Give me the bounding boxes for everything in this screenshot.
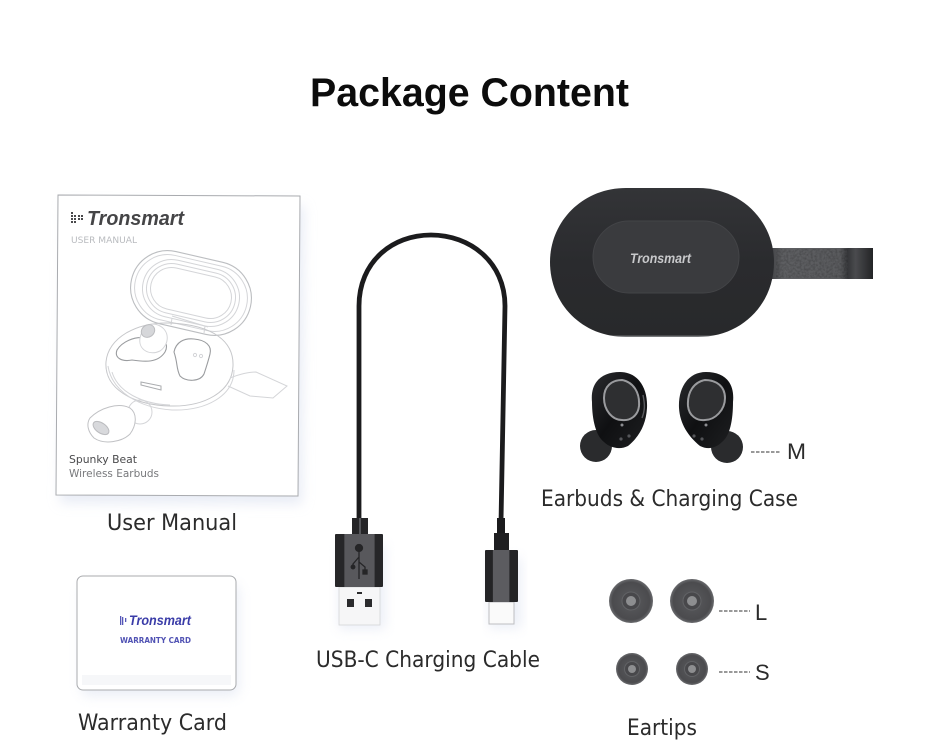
icon: USB trident [351, 544, 367, 579]
panel: charging case [550, 188, 873, 337]
callout: size M: M [787, 439, 806, 464]
manual product name: Spunky Beat [69, 454, 137, 466]
right earbud [679, 372, 743, 463]
label: warranty card: Warranty Card [78, 711, 227, 736]
callout: size S: S [755, 660, 770, 685]
callout: size S [719, 660, 770, 685]
manual product type: Wireless Earbuds [69, 468, 159, 480]
panel: USB-C charging cable [335, 235, 521, 629]
manual brand: Tronsmart [87, 208, 185, 230]
icon: manual logo dots [71, 212, 83, 223]
icon: warranty logo dots [120, 616, 126, 625]
case logo: Tronsmart [630, 251, 691, 266]
warranty brand: Tronsmart [129, 613, 191, 628]
USB-A connector [335, 518, 385, 629]
panel: warranty card [77, 576, 239, 696]
panel: user manual [56, 195, 304, 504]
eartips large [609, 579, 714, 623]
panel: eartips [609, 579, 770, 685]
case body [550, 188, 774, 337]
title: Package Content [310, 71, 629, 115]
callout: size L: L [755, 600, 767, 625]
label: eartips: Eartips [627, 716, 697, 741]
label: earbuds and charging case: Earbuds & Charging Case [541, 487, 798, 512]
manual subtitle: USER MANUAL [71, 236, 137, 246]
case logo panel [593, 221, 739, 293]
case strap [770, 248, 873, 279]
warranty card text: WARRANTY CARD [120, 636, 191, 645]
callout: size L [719, 600, 767, 625]
USB-C connector [485, 518, 521, 628]
left earbud [580, 372, 647, 462]
panel: earbuds [580, 372, 806, 464]
callout: size M [751, 439, 806, 464]
line drawing: earbuds case [88, 243, 287, 442]
cable [359, 235, 505, 522]
label: USB-C charging cable: USB-C Charging Cable [316, 648, 540, 673]
label: user manual: User Manual [107, 511, 237, 536]
eartips small [616, 653, 708, 685]
